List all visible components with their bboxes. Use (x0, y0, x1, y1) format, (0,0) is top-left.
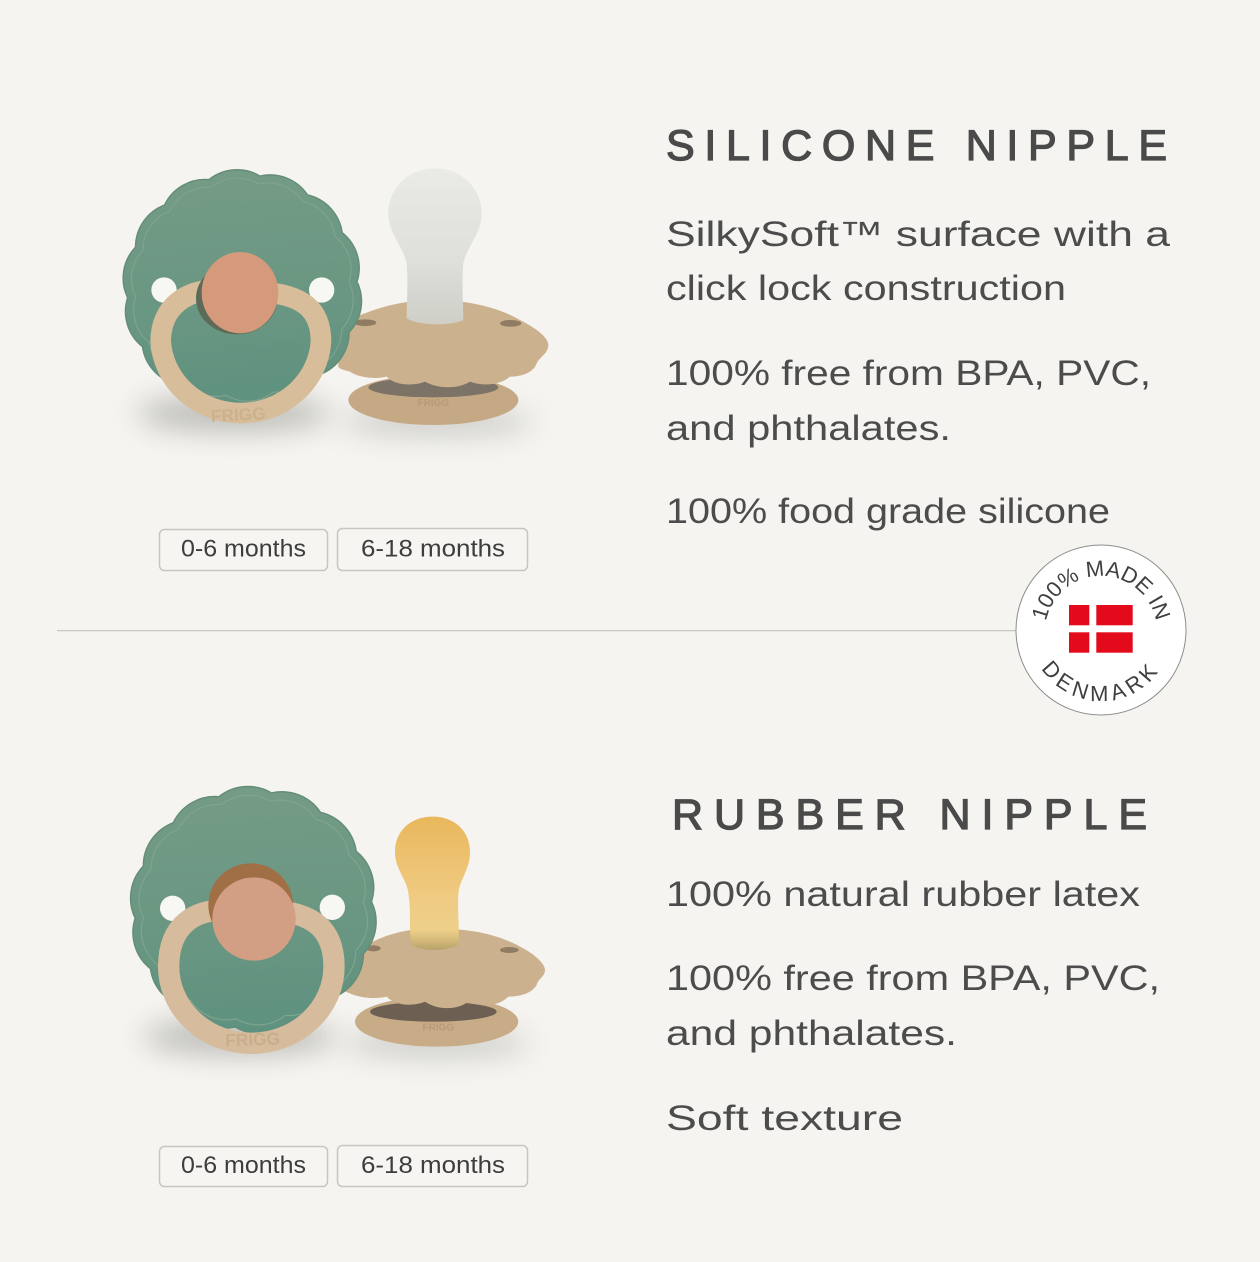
size tag: 0-6 months (160, 530, 328, 570)
size tag: 6-18 months: 6-18 months (361, 536, 505, 562)
size tag: 6-18 months (338, 1146, 528, 1186)
image: rubber pacifiers: FRIGG (423, 1023, 454, 1034)
panel: silicone nipple (116, 122, 1171, 570)
text: rubber features: and phthalates. (666, 1014, 957, 1053)
text: silicone features: and phthalates. (666, 409, 951, 448)
text: rubber features: Soft texture (666, 1099, 903, 1138)
divider line (57, 630, 1017, 631)
size tag: 0-6 months: 0-6 months (181, 1152, 306, 1179)
image: silicone pacifiers: FRIGG (210, 403, 266, 426)
text: silicone features: 100% food grade silicone (666, 492, 1110, 531)
panel: rubber nipple (123, 778, 1160, 1186)
text: silicone features: click lock construction (666, 269, 1066, 308)
image: silicone pacifiers: FRIGG (418, 398, 449, 409)
size tag: 0-6 months (160, 1146, 328, 1186)
text: silicone features (666, 215, 1171, 531)
heading: silicone nipple: SILICONE NIPPLE (666, 122, 1167, 170)
text: rubber features: 100% natural rubber latex (666, 875, 1141, 914)
badge: 100% made in Denmark (1016, 544, 1186, 716)
size tag: 6-18 months: 6-18 months (361, 1152, 505, 1179)
size tag: 0-6 months: 0-6 months (181, 536, 306, 562)
badge: 100% made in Denmark: 100% MADE IN (1032, 560, 1170, 620)
image: silicone pacifiers (116, 162, 548, 435)
heading: rubber nipple: RUBBER NIPPLE (672, 791, 1147, 839)
text: silicone features: SilkySoft™ surface with a (666, 215, 1171, 254)
text: rubber features: 100% free from BPA, PVC, (666, 959, 1160, 998)
text: rubber features (666, 875, 1160, 1138)
text: silicone features: 100% free from BPA, PVC, (666, 354, 1151, 393)
badge: 100% made in Denmark: DENMARK (1042, 660, 1158, 702)
image: rubber pacifiers: FRIGG (225, 1028, 280, 1050)
icon: Danish flag (1069, 605, 1133, 653)
image: rubber pacifiers (123, 778, 545, 1057)
size tag: 6-18 months (338, 528, 528, 570)
